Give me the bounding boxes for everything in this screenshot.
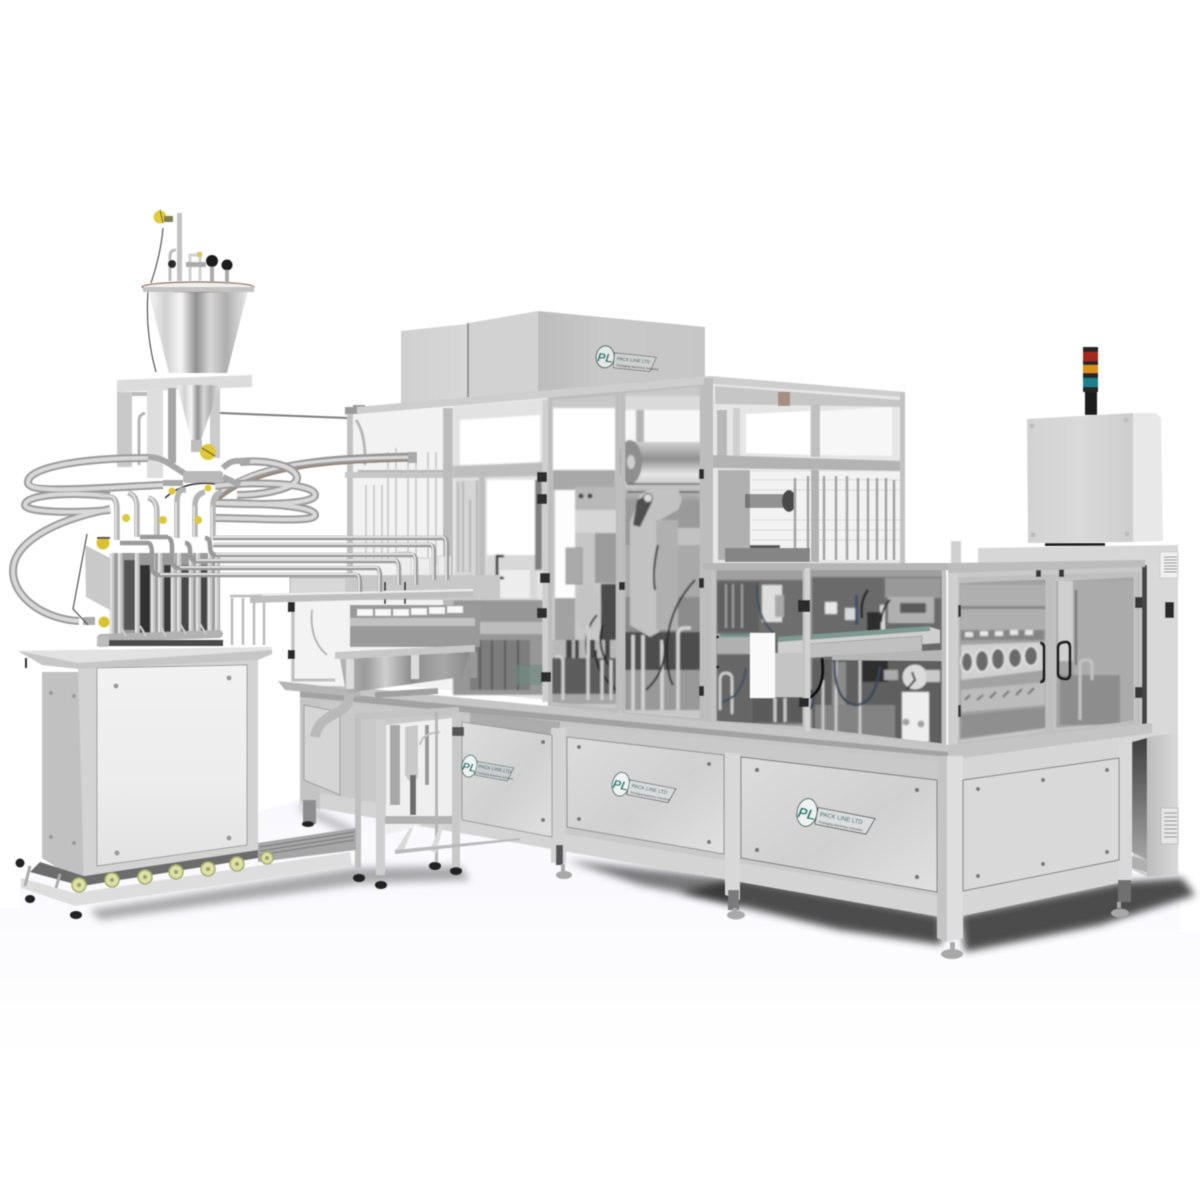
panel 1 logo: [460, 754, 517, 785]
lower rail: [300, 790, 940, 917]
vent bottom: [1161, 808, 1178, 844]
legs: [300, 700, 1132, 942]
lower left glass box: [278, 578, 360, 697]
hopper cones: [142, 282, 254, 452]
door B plain glass: [1056, 577, 1134, 728]
hood logo: PACK LINE LTD: [617, 356, 651, 365]
goose neck pipes: [100, 490, 222, 540]
signal beacon: [1083, 347, 1098, 415]
yellow valve top: [154, 210, 173, 224]
panel 3: [741, 757, 937, 892]
panel 2: [567, 737, 724, 854]
door 1 interior: [552, 408, 618, 704]
hood logo: Packaging Machinery Industries: [616, 363, 659, 372]
panel section B: [806, 577, 942, 745]
yellow valve left lower: [83, 616, 110, 628]
panel 3 logo: PL: [797, 804, 817, 823]
right base: [948, 727, 1150, 916]
manifold centre: [148, 444, 250, 498]
hood logo: [595, 345, 661, 374]
product conveyor: [714, 626, 943, 701]
panel 2 logo: PL: [612, 777, 629, 794]
left lower panel: [304, 705, 340, 795]
product stand: [353, 707, 520, 889]
hood logo: PL: [597, 350, 613, 366]
center glass doors: [537, 383, 709, 720]
right glass doors: [948, 560, 1147, 755]
product pipes: [120, 537, 447, 592]
panel 1: [460, 722, 552, 837]
door 2 interior: [618, 396, 701, 710]
panel 1 logo: PL: [461, 761, 477, 775]
drain pipe: [315, 695, 349, 737]
clear product hose: [217, 452, 417, 500]
panel 3 logo: Packaging Machinery Industries: [818, 820, 864, 832]
panel 2 logo: PACK LINE LTD: [631, 783, 668, 796]
panel 1 logo: PACK LINE LTD: [478, 764, 512, 775]
panel 3 logo: [795, 797, 876, 839]
back left glass frame: [345, 396, 548, 700]
panel 3 logo: PACK LINE LTD: [819, 812, 864, 826]
left cabinet: [18, 647, 272, 885]
braided hoses: [13, 458, 315, 621]
panel 2 logo: [610, 771, 677, 806]
front base: [300, 692, 945, 917]
yellow valve centre: [200, 444, 216, 460]
hood boxes: [401, 311, 705, 410]
glass section left: [453, 398, 548, 700]
base tray and rollers: [16, 828, 356, 919]
panel 2 logo: Packaging Machinery Industries: [630, 790, 670, 802]
stacked cups: [398, 548, 478, 583]
hopper top fittings: [147, 210, 232, 372]
tower frame: [117, 375, 347, 478]
top frame: [345, 376, 905, 723]
valve bank: [73, 490, 223, 647]
panel 1 logo: Packaging Machinery Industries: [477, 771, 515, 781]
panel section A: [717, 580, 807, 724]
main machine base: [300, 682, 1152, 959]
door A with sight glasses: [959, 577, 1047, 740]
stainless trough: [335, 645, 477, 698]
floor shadows: [90, 802, 1195, 952]
rack behind valves: [230, 596, 264, 645]
door frames: [545, 384, 702, 720]
control box and beacon: [1027, 347, 1163, 546]
lower right glass: [703, 563, 950, 748]
yellow valve left upper: [96, 536, 110, 550]
vent top: [1160, 552, 1178, 578]
filling station: [250, 575, 500, 647]
right end platform and side cabinet: [951, 541, 1178, 877]
panel 4: [963, 758, 1119, 891]
right wing upper glass: [713, 384, 905, 565]
feet: [302, 821, 1129, 959]
